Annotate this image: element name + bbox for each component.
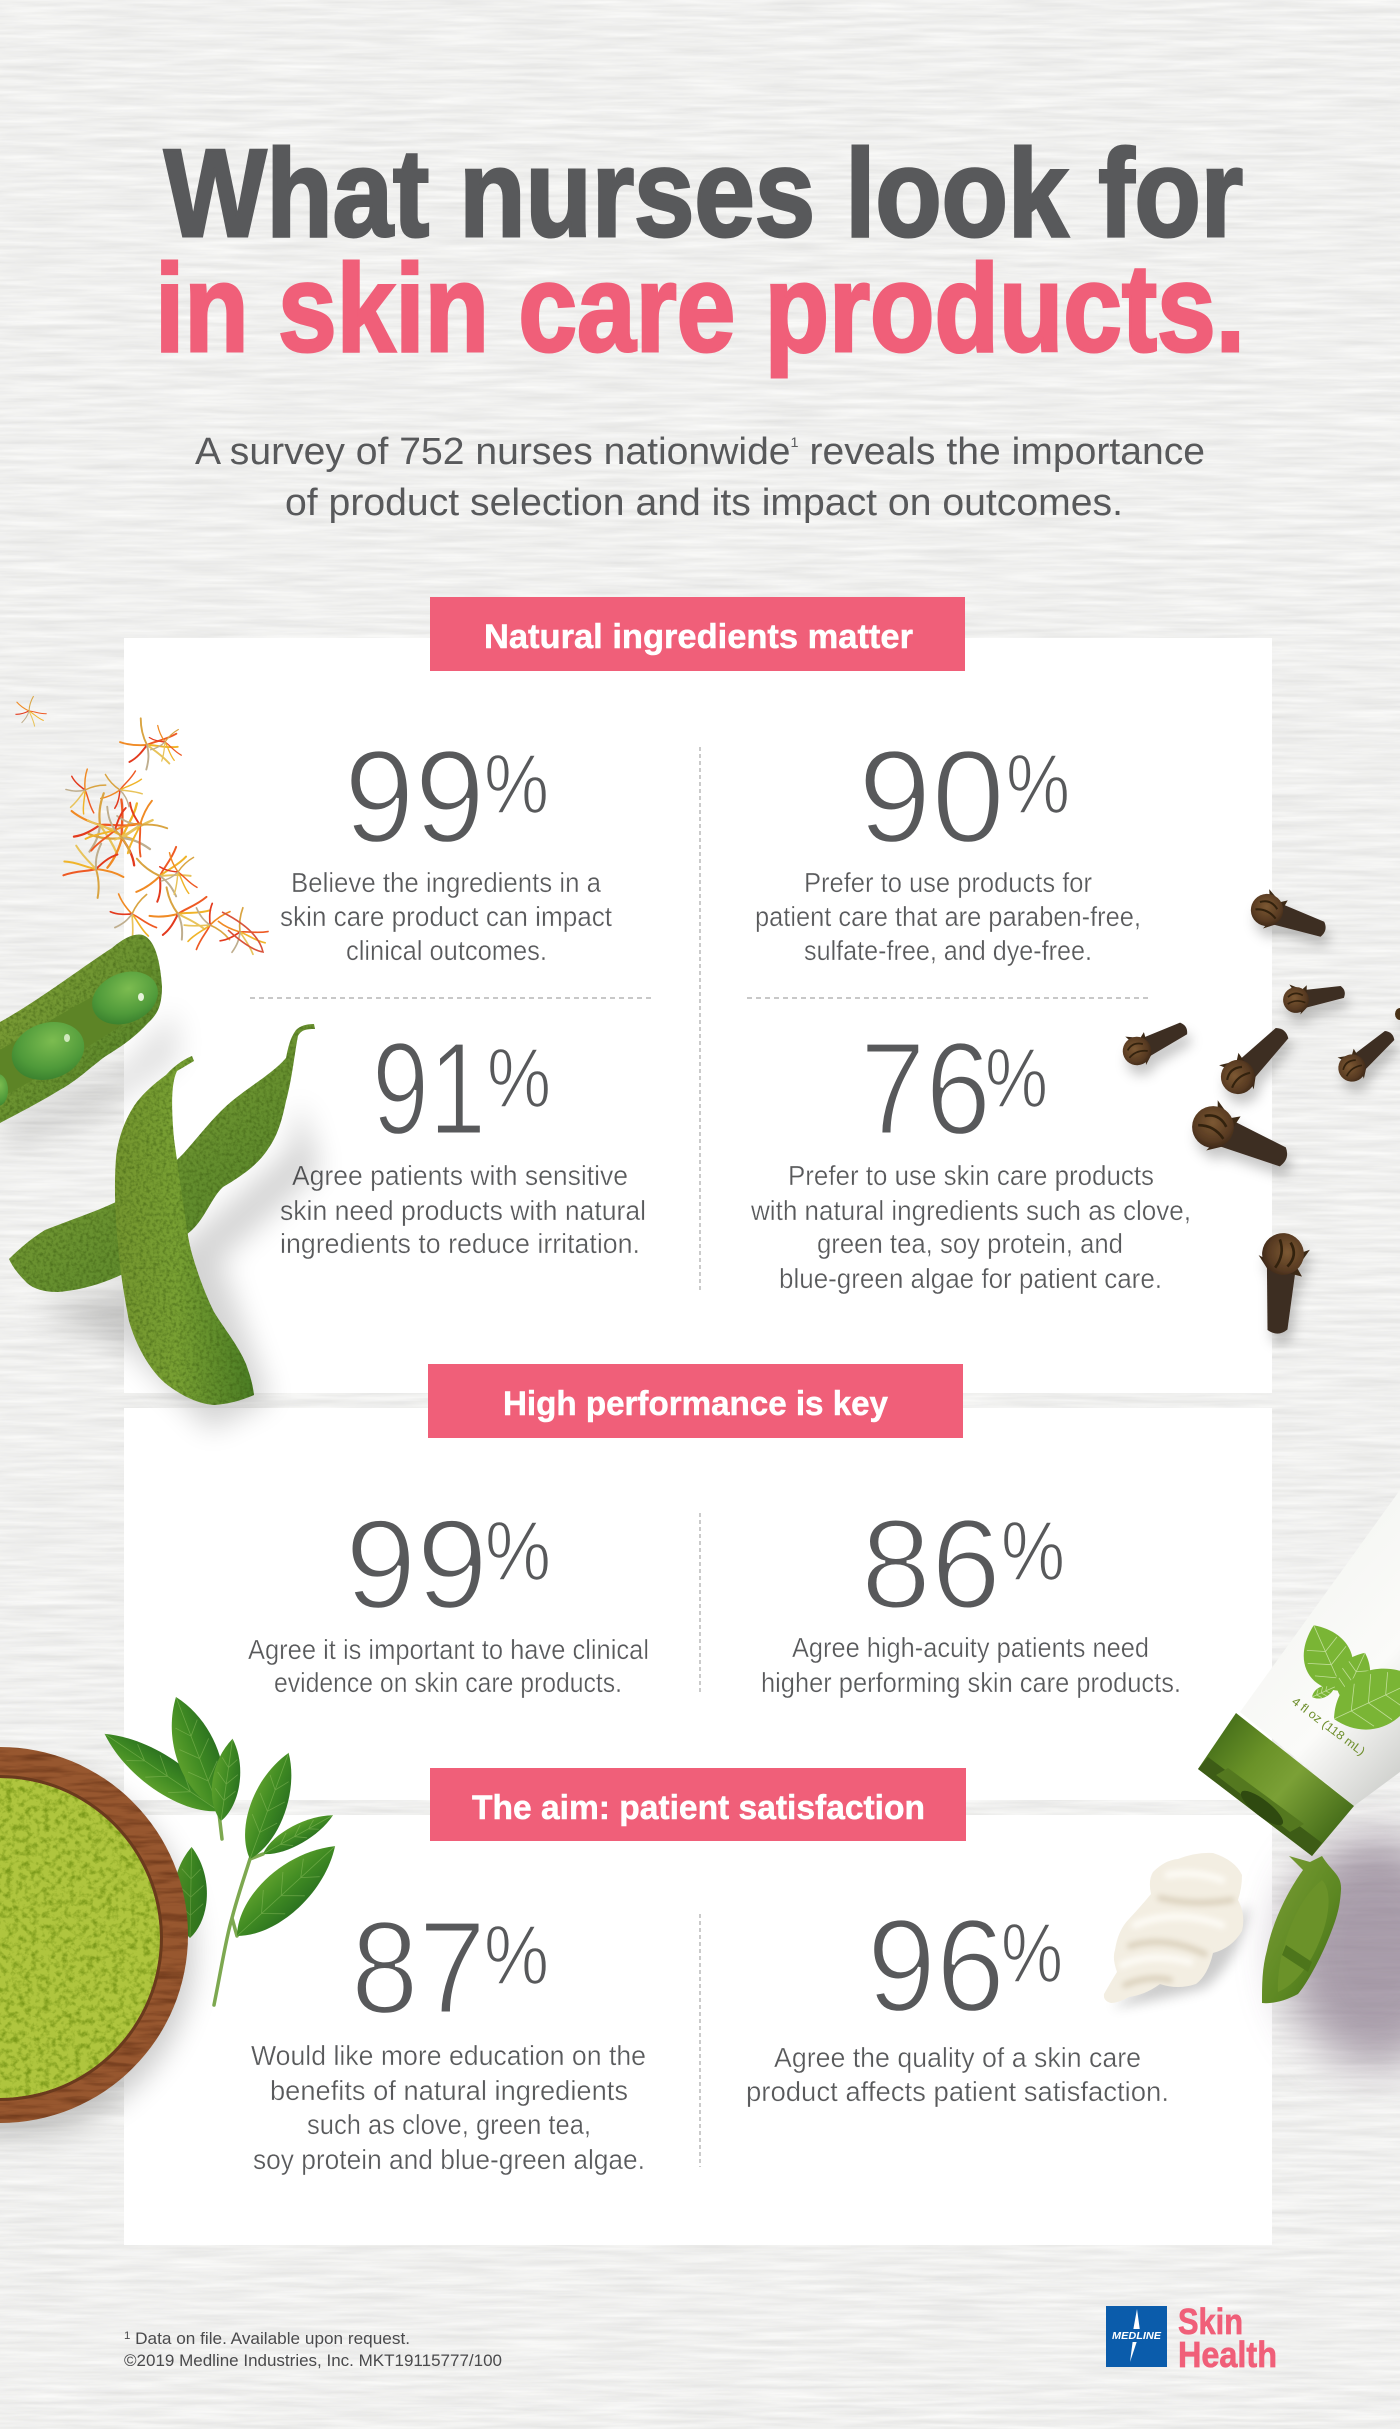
- stat: 87 percent would like: 87: [351, 1894, 486, 2041]
- stat: 99 percent agree: 99: [345, 1493, 488, 1635]
- illustration: cream swirl: [1104, 1853, 1250, 2008]
- Medline badge: MEDLINE: [1112, 2331, 1161, 2342]
- stat: 96 percent agree: product affects patient satisfaction.: [746, 2076, 1169, 2107]
- logo: Medline Skin Health: [1106, 2301, 1277, 2375]
- stat: 76 percent prefer: green tea, soy protein, and: [817, 1228, 1123, 1259]
- heading: natural ingredients matter: Natural ingredients matter: [484, 618, 913, 656]
- footnote: ©2019 Medline Industries, Inc. MKT19115777/100: [124, 2352, 502, 2370]
- stat: 87 percent would like: Would like more education on the: [251, 2040, 646, 2071]
- stat: 87 percent would like: such as clove, green tea,: [307, 2109, 591, 2140]
- illustration: green tea leaves: [94, 1690, 349, 2005]
- tube leaves: [1291, 1616, 1400, 1744]
- Skin Health wordmark: Health: [1178, 2334, 1277, 2375]
- stat: 96 percent agree: Agree the quality of a skin care: [774, 2042, 1141, 2073]
- panel: natural ingredients matter: [124, 597, 1272, 1393]
- subtitle: reveals the importance: [799, 431, 1205, 473]
- stat: 90 percent prefer: Prefer to use products for: [804, 867, 1092, 898]
- pod lying right: [9, 1024, 315, 1292]
- stat: 96 percent agree: [746, 1892, 1169, 2107]
- stat: 90 percent prefer: 90: [858, 723, 1005, 870]
- stat: 86 percent agree: Agree high-acuity patients need: [792, 1632, 1149, 1663]
- stat: 96 percent agree: %: [1001, 1906, 1063, 2000]
- stat: 87 percent would like: soy protein and blue-green algae.: [253, 2144, 645, 2175]
- subtitle: 1: [791, 434, 799, 450]
- illustration: skin care tube: [1198, 1490, 1400, 2003]
- edamame beans: [0, 962, 166, 1106]
- tube size label: 4 fl oz (118 mL): [1289, 1694, 1368, 1758]
- stat: 91 percent agree: Agree patients with sensitive: [292, 1160, 628, 1191]
- subtitle: A survey of 752 nurses nationwide: [195, 431, 774, 473]
- stat: 90 percent prefer: %: [1006, 737, 1070, 831]
- stat: 99 percent agree: [248, 1493, 649, 1698]
- stat: 99 percent agree: evidence on skin care products.: [274, 1667, 622, 1698]
- title line 2: in skin care products.: [155, 240, 1245, 378]
- Skin Health wordmark: [1178, 2301, 1277, 2375]
- stat: 91 percent agree: [280, 1015, 646, 1259]
- heading: high performance is key: [428, 1364, 963, 1438]
- illustration: crossed edamame pods: [9, 1024, 320, 1430]
- stat: 76 percent prefer: Prefer to use skin care products: [788, 1160, 1154, 1191]
- heading: high performance is key: High performance is key: [503, 1385, 888, 1423]
- footnote: [124, 2330, 502, 2370]
- stat: 86 percent agree: higher performing skin care products.: [761, 1667, 1181, 1698]
- stat: 86 percent agree: [761, 1493, 1181, 1698]
- title: [155, 125, 1245, 378]
- Medline badge: [1106, 2306, 1167, 2367]
- stat: 87 percent would like: %: [484, 1908, 549, 2002]
- stat: 76 percent prefer: blue-green algae for patient care.: [779, 1263, 1162, 1294]
- illustration: tube shadow: [1285, 1835, 1400, 2065]
- open flip lid: [1262, 1856, 1341, 2003]
- footnote: Data on file. Available upon request.: [130, 2330, 410, 2348]
- subtitle: [195, 431, 1205, 524]
- stat: 86 percent agree: 86: [861, 1493, 1001, 1635]
- stat: 76 percent prefer: [750, 1015, 1191, 1294]
- stat: 99 percent believe: skin care product can impact: [280, 901, 612, 932]
- Skin Health wordmark: Skin: [1178, 2301, 1243, 2342]
- subtitle: of product selection and its impact on outcomes.: [285, 482, 1123, 524]
- illustration: saffron threads: [9, 691, 275, 964]
- illustration: open edamame pod: [0, 935, 178, 1150]
- title line 1: What nurses look for: [164, 125, 1243, 263]
- stat: 99 percent agree: %: [485, 1504, 551, 1598]
- stat: 99 percent believe: [280, 723, 612, 966]
- stat: 96 percent agree: 96: [867, 1892, 1005, 2039]
- stat: 91 percent agree: 91: [372, 1015, 486, 1162]
- stat: 91 percent agree: %: [487, 1031, 551, 1125]
- footnote: 1: [124, 2330, 130, 2342]
- tube cap: [1198, 1713, 1354, 1856]
- stat: 87 percent would like: [251, 1894, 646, 2175]
- stat: 86 percent agree: %: [1001, 1504, 1065, 1598]
- pod standing: [115, 1056, 254, 1405]
- heading: natural ingredients matter: [430, 597, 965, 671]
- heading: the aim patient satisfaction: The aim: patient satisfaction: [472, 1789, 925, 1827]
- stat: 87 percent would like: benefits of natural ingredients: [270, 2075, 628, 2106]
- illustration: matcha powder in wooden bowl: [0, 1747, 194, 2136]
- stat: 99 percent believe: Believe the ingredients in a: [291, 867, 601, 898]
- stat: 76 percent prefer: %: [985, 1031, 1048, 1125]
- stat: 76 percent prefer: with natural ingredients such as clove,: [750, 1195, 1191, 1226]
- stat: 90 percent prefer: patient care that are paraben-free,: [755, 901, 1141, 932]
- stat: 99 percent believe: clinical outcomes.: [346, 935, 547, 966]
- stat: 91 percent agree: ingredients to reduce irritation.: [280, 1228, 640, 1259]
- stat: 90 percent prefer: sulfate-free, and dye-free.: [804, 935, 1092, 966]
- stat: 99 percent agree: Agree it is important to have clinical: [248, 1634, 649, 1665]
- stat: 76 percent prefer: 76: [860, 1015, 991, 1162]
- stat: 90 percent prefer: [755, 723, 1141, 966]
- stat: 99 percent believe: 99: [344, 723, 485, 870]
- panel: patient satisfaction: [124, 1768, 1272, 2245]
- panel: high performance is key: [124, 1364, 1272, 1800]
- illustration: cloves: [1116, 885, 1400, 1336]
- stat: 99 percent believe: %: [484, 737, 549, 831]
- heading: the aim patient satisfaction: [430, 1768, 966, 1841]
- stat: 91 percent agree: skin need products with natural: [280, 1195, 646, 1226]
- tube body: [1240, 1490, 1400, 1806]
